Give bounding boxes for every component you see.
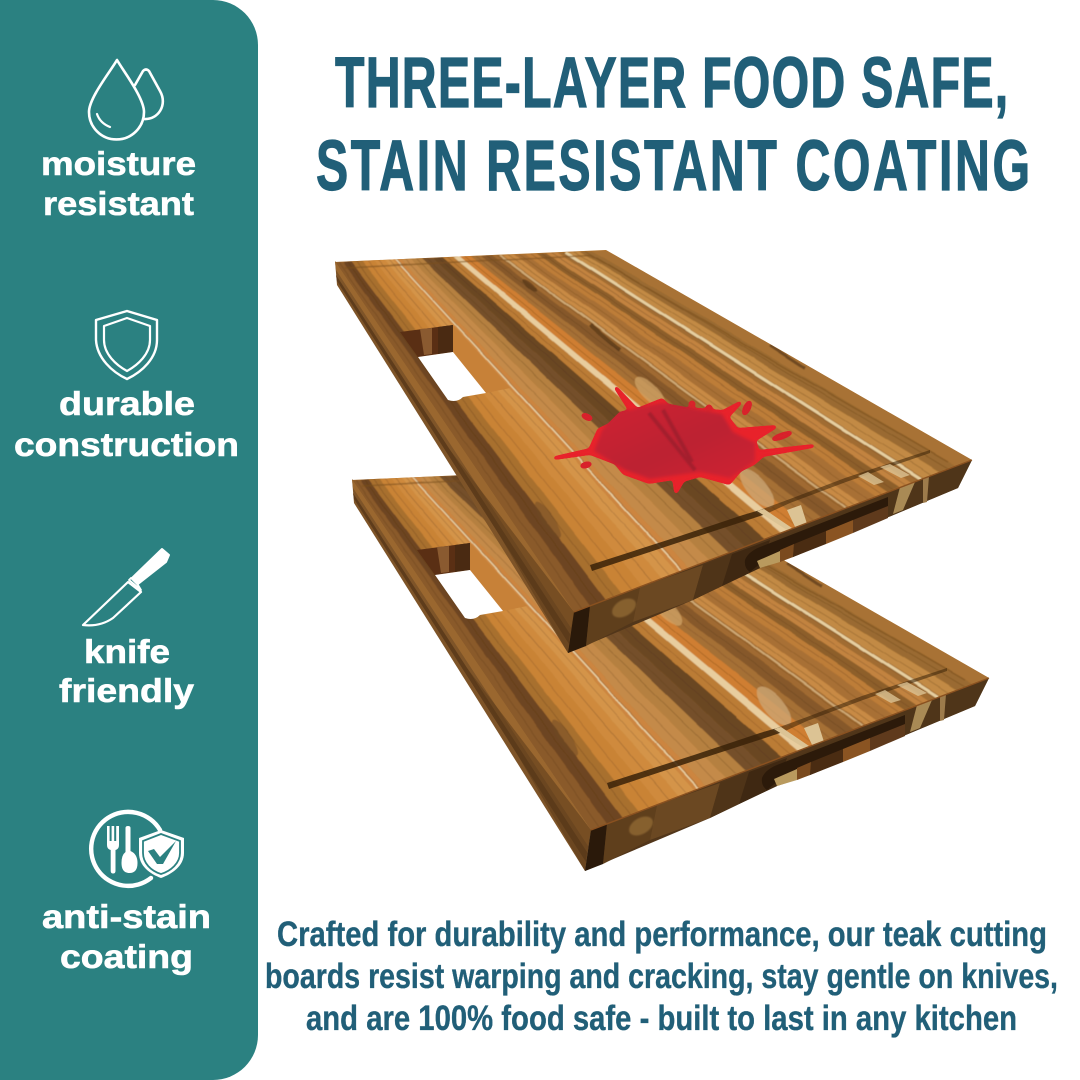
- icon: shield: [96, 311, 157, 379]
- label: anti-stain coating: coating: [60, 938, 193, 975]
- body description: [265, 915, 1058, 1038]
- title: STAIN RESISTANT COATING: [316, 126, 1030, 205]
- label: durable construction: construction: [14, 426, 239, 463]
- label: durable construction: [14, 385, 239, 463]
- label: knife friendly: knife: [84, 633, 170, 670]
- label: moisture resistant: [41, 145, 196, 222]
- red stain splatter: [555, 388, 813, 492]
- icon: knife: [83, 549, 169, 625]
- label: knife friendly: friendly: [59, 672, 195, 709]
- icon: cutlery plate with shield: [91, 812, 184, 886]
- panel: features sidebar: [0, 0, 258, 1080]
- label: anti-stain coating: [42, 898, 211, 975]
- title: [316, 43, 1030, 205]
- label: moisture resistant: resistant: [43, 185, 194, 222]
- upper cutting board: [325, 250, 985, 653]
- icon: water drops: [89, 60, 163, 139]
- title: THREE-LAYER FOOD SAFE,: [335, 43, 1008, 122]
- panel background: [0, 0, 258, 1080]
- label: durable construction: durable: [59, 385, 195, 422]
- label: anti-stain coating: anti-stain: [42, 898, 211, 935]
- label: knife friendly: [59, 633, 195, 709]
- label: moisture resistant: moisture: [41, 145, 196, 182]
- lower cutting board: [342, 468, 1002, 871]
